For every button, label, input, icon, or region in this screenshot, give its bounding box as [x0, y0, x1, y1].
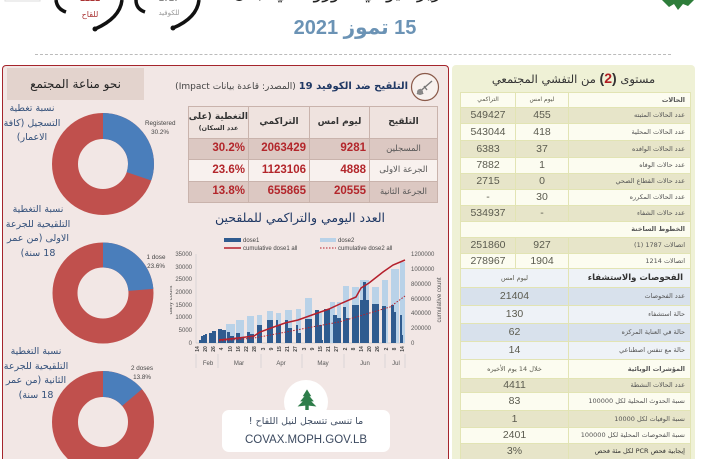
label: second dose coverage text: نسبة التغطية التلقيحية للجرعة الثانية (من عمر 18 سنة) [4, 346, 68, 400]
legend: cumulative dose2 all [338, 246, 392, 252]
panel: vaccination (red frame) [2, 65, 449, 459]
date labels: 3 [302, 347, 308, 350]
table: vaccination totals: 4888 [340, 164, 366, 176]
label: registered [145, 120, 176, 136]
date labels: 27 [293, 346, 299, 352]
date labels: 14 [195, 346, 201, 352]
table: cases and hotlines: عدد الحالات الوافده [632, 145, 685, 153]
chart: daily and cumulative vaccinations: cumulative count [437, 277, 443, 323]
left axis: 35000 [175, 252, 193, 258]
heading: towards community immunity: نحو مناعة المجتمع [30, 77, 121, 91]
date labels: 15 [318, 346, 324, 352]
legend: dose2 [338, 238, 355, 244]
date labels: 4 [219, 347, 225, 350]
date labels: 20 [203, 346, 209, 352]
table: cases and hotlines: اتصالات 1214 [645, 257, 685, 265]
month labels: May [317, 361, 329, 367]
table: cases and hotlines: عدد حالات الوفاه [639, 161, 685, 169]
callout card [222, 410, 390, 452]
heading: community transmission level 2: مستوى (2) من التفشي المجتمعي [492, 70, 655, 86]
table: vaccination totals: 23.6% [212, 164, 245, 176]
table: vaccination totals: 30.2% [212, 142, 245, 154]
heading: towards community immunity [7, 68, 144, 100]
table: cases and hotlines: الحالات [662, 96, 685, 104]
table: tests and hospitalisation: نسبة الوفيات لكل 10000 [614, 415, 685, 423]
callout card: ما تنسى تتسجل لنيل اللقاح ! [249, 416, 363, 427]
table: vaccination totals: التغطية (على [189, 112, 248, 122]
table: cases and hotlines: عدد الحالات المحلية [632, 128, 685, 136]
table: tests and hospitalisation: نسبة الفحوصات المحلية لكل 100000 [581, 431, 685, 439]
table: tests and hospitalisation: نسبة الحدوث المحلية لكل 100000 [588, 397, 685, 405]
table: tests and hospitalisation [460, 269, 691, 459]
callout card: COVAX.MOPH.GOV.LB [245, 434, 367, 446]
donut chart: registered 30.2% [52, 113, 154, 215]
date labels [195, 346, 406, 352]
table: tests and hospitalisation: 21404 [500, 290, 529, 302]
table: cases and hotlines: التراكمي [477, 96, 499, 103]
table: cases and hotlines: 1904 [530, 255, 554, 267]
table: cases and hotlines: 927 [533, 239, 551, 251]
label: registered: 30.2% [151, 129, 169, 136]
table: cases and hotlines: عدد الحالات المثبته [634, 111, 685, 119]
table: cases and hotlines: 2715 [476, 175, 500, 187]
right axis: 0 [411, 341, 415, 347]
donut chart: second dose 13.8% [52, 371, 154, 459]
table: vaccination totals: المسجلين [386, 144, 421, 154]
table: vaccination totals: 20555 [334, 185, 366, 197]
table: cases and hotlines: 1 [539, 159, 545, 171]
table: vaccination totals: الجرعة الثانية [380, 187, 427, 197]
left axis: 20000 [175, 290, 193, 296]
table: cases and hotlines: 0 [539, 175, 545, 187]
table: vaccination totals [188, 106, 438, 203]
date labels: 14 [400, 346, 406, 352]
date labels: 20 [367, 346, 373, 352]
table: cases and hotlines: 534937 [470, 207, 506, 219]
donut chart: first dose 23.6% [52, 242, 154, 344]
table: cases and hotlines: 37 [536, 143, 548, 155]
top header fragment: cropped banner with brackets [4, 0, 694, 32]
table: tests and hospitalisation: 2401 [503, 429, 526, 441]
month labels: Feb [203, 361, 214, 367]
chart: daily and cumulative vaccinations [170, 238, 443, 368]
callout: register for the vaccine [222, 380, 390, 452]
table: vaccination totals: 1123106 [262, 164, 306, 176]
right axis: 600000 [411, 297, 432, 303]
table: vaccination totals: عدد السكان) [199, 124, 238, 132]
date labels: 8 [392, 347, 398, 350]
left axis: 25000 [175, 277, 193, 283]
label: second dose: 2 doses [131, 365, 153, 372]
table: cases and hotlines: - [540, 207, 544, 219]
table: tests and hospitalisation: 4411 [503, 379, 526, 391]
cumulative dose2 line [219, 296, 405, 341]
top header fragment: cropped banner with brackets: للقاح [82, 10, 98, 19]
table: tests and hospitalisation: خلال 14 يوم الأخيره [487, 365, 542, 373]
table: cases and hotlines: الخطوط الساخنة [631, 225, 685, 233]
table: tests and hospitalisation: عدد الفحوصات [644, 292, 685, 300]
table: tests and hospitalisation: حالة استشفاء [648, 310, 685, 318]
legend [224, 238, 392, 252]
left axis: 15000 [175, 303, 193, 309]
table: cases and hotlines: - [486, 191, 490, 203]
logo bubble [284, 380, 328, 424]
table: cases and hotlines: 30 [536, 191, 548, 203]
table: tests and hospitalisation: 130 [506, 308, 523, 320]
right axis: 1000000 [411, 267, 435, 273]
icon: vaccine syringe [410, 72, 440, 102]
panel: community transmission level [452, 65, 695, 459]
table: cases and hotlines: 418 [533, 126, 551, 138]
month labels [203, 361, 400, 367]
table: tests and hospitalisation: 83 [509, 395, 520, 407]
table: cases and hotlines: 549427 [470, 109, 506, 121]
table: cases and hotlines [460, 92, 691, 268]
date labels: 28 [252, 346, 258, 352]
table: vaccination totals: الجرعة الاولى [379, 165, 428, 175]
month labels: Mar [234, 361, 244, 367]
date labels: 21 [326, 346, 332, 352]
table: tests and hospitalisation: حالة مع تنفس اصطناعي [619, 346, 685, 354]
table: cases and hotlines: 251860 [470, 239, 506, 251]
table: tests and hospitalisation: 1 [512, 413, 517, 425]
table: tests and hospitalisation: عدد الحالات النشطة [631, 381, 685, 389]
left axis: 0 [189, 341, 193, 347]
date labels: 26 [211, 346, 217, 352]
table: tests and hospitalisation: ليوم امس [501, 274, 528, 282]
date labels: 21 [285, 346, 291, 352]
left axis: 30000 [175, 265, 193, 271]
date heading: 15 تموز 2021 [294, 17, 416, 39]
date labels: 2 [343, 347, 349, 350]
date labels: 22 [244, 346, 250, 352]
right axis: 200000 [411, 326, 432, 332]
date labels: 10 [228, 346, 234, 352]
left axis: 10000 [175, 315, 193, 321]
date labels: 9 [269, 347, 275, 350]
legend: cumulative dose1 all [243, 246, 297, 252]
table: vaccination totals: 655865 [268, 185, 306, 197]
table: tests and hospitalisation: 62 [509, 326, 520, 338]
table: tests and hospitalisation: 3% [507, 445, 522, 457]
left axis: 5000 [179, 328, 193, 334]
date labels: 14 [359, 346, 365, 352]
month labels: Jun [360, 361, 370, 367]
label: registration coverage text: نسبة تغطية التسجيل (كافة الاعمار) [4, 103, 60, 143]
label: first dose [146, 254, 166, 270]
table: cases and hotlines: اتصالات 1787 (1) [634, 241, 685, 249]
date labels: 8 [351, 347, 357, 350]
table: cases and hotlines: عدد حالات القطاع الصحي [615, 177, 685, 185]
table: vaccination totals: التراكمي [259, 117, 299, 127]
table: tests and hospitalisation: المؤشرات الوبائية [628, 365, 685, 373]
table: tests and hospitalisation: إيجابية فحص PCR لكل مئة فحص [595, 447, 685, 455]
table: cases and hotlines: 543044 [470, 126, 506, 138]
table: vaccination totals: 9281 [340, 142, 366, 154]
label: second dose: 13.8% [133, 374, 151, 381]
table: cases and hotlines: عدد الحالات المكرره [630, 193, 685, 201]
table: cases and hotlines: 278967 [470, 255, 506, 267]
legend: dose1 [243, 238, 260, 244]
heading: daily and cumulative vaccinated: العدد اليومي والتراكمي للملقحين [215, 210, 385, 225]
date labels: 16 [236, 346, 242, 352]
label: first dose: 23.6% [147, 263, 165, 270]
table: vaccination totals: 2063429 [261, 142, 306, 154]
right axis: 400000 [411, 311, 432, 317]
table: tests and hospitalisation: الفحوصات والاستشفاء [588, 273, 683, 283]
table: cases and hotlines: 7882 [476, 159, 500, 171]
icon: cedar tree [298, 390, 316, 410]
left axis [175, 252, 193, 347]
table: cases and hotlines: ليوم امس [530, 96, 554, 103]
label: first dose: 1 dose [147, 254, 165, 261]
table: vaccination totals: 13.8% [212, 185, 245, 197]
label: first dose coverage text: نسبة التغطية التلقيحية للجرعة الاولى (من عمر 18 سنة) [6, 204, 70, 258]
top header fragment: cropped banner with brackets: للكوفيد [158, 9, 180, 17]
month labels: Jul [392, 361, 400, 367]
date labels: 15 [277, 346, 283, 352]
cumulative dose1 line [219, 260, 405, 340]
table: cases and hotlines: 6383 [476, 143, 500, 155]
table: tests and hospitalisation: حالة في العناية المركزه [621, 328, 685, 336]
label: registered: Registered [145, 120, 175, 127]
table: cases and hotlines: عدد حالات الشفاء [637, 209, 685, 217]
dose2 bars [226, 262, 405, 343]
date labels: 27 [334, 346, 340, 352]
date labels: 26 [375, 346, 381, 352]
label: second dose [131, 365, 153, 381]
table: cases and hotlines: 455 [533, 109, 551, 121]
right axis [411, 252, 435, 347]
right axis: 800000 [411, 282, 432, 288]
date labels: 2 [384, 347, 390, 350]
table: tests and hospitalisation: 14 [509, 344, 520, 356]
heading: vaccination against covid 19: التلقيح ضد الكوفيد 19 (المصدر: قاعدة بيانات Impact) [175, 81, 408, 92]
table: vaccination totals: ليوم امس [318, 117, 361, 127]
table: vaccination totals: التلقيح [388, 117, 419, 127]
date labels: 3 [261, 347, 267, 350]
right axis: 1200000 [411, 252, 435, 258]
month labels: Apr [276, 361, 286, 367]
date labels: 9 [310, 347, 316, 350]
dose1 bars [199, 282, 403, 343]
